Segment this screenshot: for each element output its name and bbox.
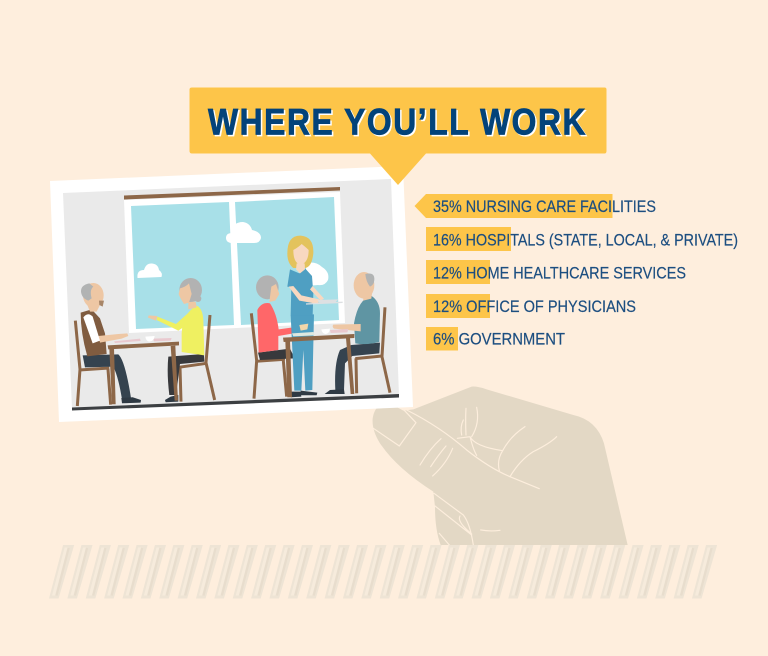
row: nursing care: 35% NURSING CARE FACILITIES [433,197,656,216]
seated man in teal [325,272,380,394]
row: home healthcare: 12% HOME HEALTHCARE SERVICES [433,264,686,282]
row: government: 6% GOVERNMENT [433,330,565,348]
row: home healthcare [426,260,686,284]
tableware [292,324,348,336]
row: physicians [426,294,636,318]
tableware [114,336,172,343]
nurse [287,236,343,397]
hatched ground stripes [49,545,717,598]
left chair [251,313,287,399]
photo background wall [63,179,399,409]
title banner [190,88,606,185]
seated woman in red [256,275,299,360]
photo white border [50,166,413,422]
employment list [414,194,738,350]
row: physicians: 12% OFFICE OF PHYSICIANS [433,297,636,316]
seated man [81,283,141,403]
window [124,187,345,333]
row: nursing care [414,194,656,218]
table [108,342,179,404]
banner shape with pointer [190,88,606,185]
illustration: hand holding photo [373,387,628,545]
left chair [75,321,111,406]
clouds [137,222,328,286]
table [283,334,354,397]
seated woman [148,278,204,402]
row: government [426,327,565,350]
right chair [355,307,390,393]
floor line [72,394,399,410]
title: WHERE YOU’LL WORK [208,102,586,143]
table and diners, left [75,278,215,406]
table and diners, right [251,236,390,399]
photo card [50,166,413,422]
title shadow: WHERE YOU’LL WORK [210,104,587,145]
right chair [179,315,215,402]
